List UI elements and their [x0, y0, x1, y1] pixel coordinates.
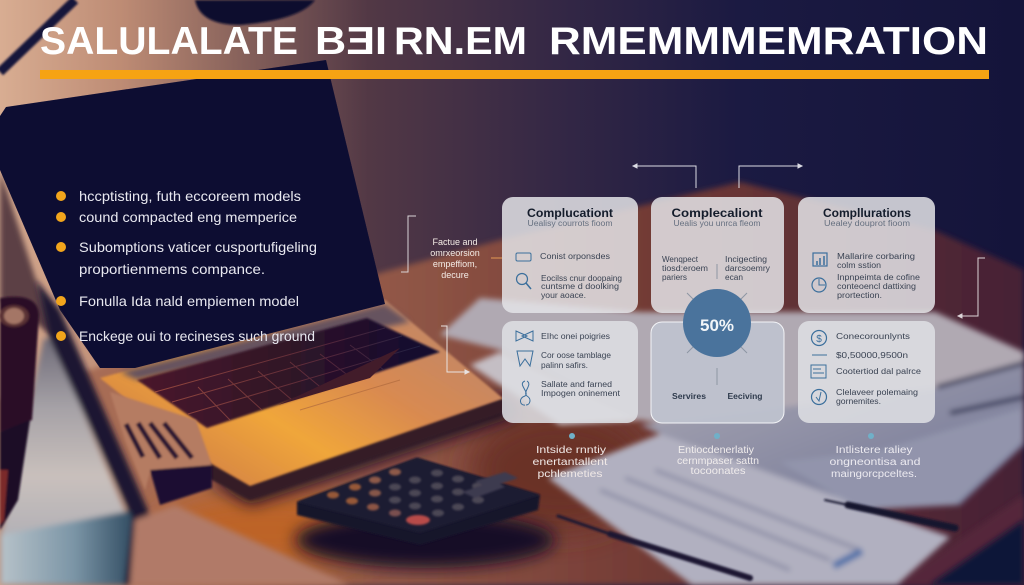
pen [558, 500, 955, 578]
bullet list: hccptisting, futh eccoreem models [79, 188, 301, 204]
lamp [0, 0, 315, 72]
panel: lower right card: Cootertiod dal palrce [836, 367, 922, 376]
caption: left: enertantallent [532, 457, 608, 468]
panel: lower left card: Cor oose tamblage [541, 351, 612, 360]
left side note [430, 237, 480, 280]
panel: lower middle card: Servires [672, 392, 707, 401]
foreground device [0, 280, 350, 585]
panel: lower right card: Clelaveer polemaing [836, 388, 918, 397]
bullet list [56, 188, 317, 344]
caption: right: Intlistere raliey [836, 445, 912, 456]
panel: top right card: prortection. [837, 291, 882, 300]
panel: top middle card: ecan [725, 273, 743, 282]
bullet list: Enckege oui to recineses such ground [79, 328, 315, 344]
panel: top left card: Eocilss cnur doopaing [541, 274, 622, 283]
bullet list: cound compacted eng memperice [79, 209, 297, 225]
panel: top right card: Inpnpeimta de cofine [837, 273, 921, 282]
caption: right: maingorcpceltes. [831, 469, 917, 480]
panel: top right card: Uealey douprot fioom [824, 219, 910, 228]
panel: top right card: Compllurations [823, 208, 911, 220]
title: SALULALATE [40, 20, 298, 63]
panel: top left card: Complucationt [527, 208, 613, 220]
top arrow left [633, 164, 696, 188]
right bracket arrow [958, 258, 985, 318]
stat circle 50%: 50% [700, 316, 734, 335]
calculator [295, 458, 555, 568]
panel: lower right card [798, 321, 935, 423]
panel: lower right card: gornemites. [836, 397, 881, 406]
title: RMEMMMEMRATION [549, 20, 988, 63]
left side note: empeffiom, [433, 259, 477, 269]
panel: lower right card: $ [816, 334, 822, 345]
caption: right [830, 433, 920, 480]
mug [0, 297, 39, 530]
bullet list: proportienmems compance. [79, 261, 265, 277]
panel: top middle card: Wenqpect [662, 255, 699, 264]
panel: top left card [502, 197, 638, 313]
laptop screen [0, 60, 385, 368]
panel: lower left card: Impogen oninement [541, 389, 621, 398]
caption: left: Intside rnntiy [536, 445, 606, 456]
panel: lower middle card [651, 322, 784, 423]
top arrow right [739, 164, 802, 188]
panel: top middle card: pariers [662, 273, 687, 282]
panel: top right card: conteoencl dattixing [837, 282, 916, 291]
title: RN.EM [394, 20, 527, 63]
panel: top right card: colm sstion [837, 261, 881, 270]
left shadow strip [0, 170, 60, 340]
left side note: Factue and [432, 237, 478, 247]
panel: top left card: your aoace. [541, 291, 586, 300]
panel: lower left card [502, 321, 638, 423]
panel: lower middle card: Eeciving [728, 392, 763, 401]
panel: lower left card: palinn safirs. [541, 361, 588, 370]
panel: lower left card: EIhc onei poigries [541, 332, 610, 341]
panel: top middle card [651, 197, 784, 313]
left side note: omrxeorsion [430, 248, 480, 258]
panel: lower right card: $0,50000,9500n [836, 350, 908, 360]
panel: lower right card: Conecorounlynts [836, 332, 910, 341]
caption: left [532, 433, 608, 480]
panel: top middle card: Uealis you unrca fleom [674, 219, 761, 228]
desk surface [0, 182, 1024, 585]
laptop base [100, 300, 520, 505]
panel: top middle card: darcsoemry [725, 264, 770, 273]
caption: middle: tocoonates [690, 466, 746, 477]
panel: lower left card: Sallate and farned [541, 380, 612, 389]
arrow to lower left card [441, 326, 469, 374]
panel: top left card: Conist orponsdes [540, 252, 610, 261]
panel: top left card: Uealisy courrots fioom [528, 219, 613, 228]
panel: top middle card: Complecaliont [672, 208, 763, 220]
panel: top middle card: tiosd:eroem [662, 264, 708, 273]
caption: right: ongneontisa and [830, 457, 920, 468]
caption: left: pchlemeties [538, 469, 602, 480]
bullet list: Fonulla Ida nald empiemen model [79, 293, 299, 309]
panel: top middle card: Incigecting [725, 255, 767, 264]
stacked papers [440, 298, 1024, 585]
caption: middle: cernmpaser sattn [677, 456, 759, 467]
title [40, 20, 988, 63]
panel: top right card [798, 197, 935, 313]
stat circle 50% [683, 289, 751, 357]
left side note: decure [441, 270, 469, 280]
panel: top right card: Mallarire corbaring [837, 252, 915, 261]
caption: middle: Entiocdenerlatiy [678, 445, 754, 456]
bracket connector left [401, 216, 416, 272]
title underline [40, 70, 989, 79]
bullet list: Subomptions vaticer cusportufigeling [79, 239, 317, 255]
panel: top left card: cuntsme d doolking [541, 282, 619, 291]
caption: middle [677, 433, 759, 477]
laptop vent [110, 392, 212, 505]
title: BƎI [315, 20, 387, 63]
orange connector [491, 257, 502, 259]
